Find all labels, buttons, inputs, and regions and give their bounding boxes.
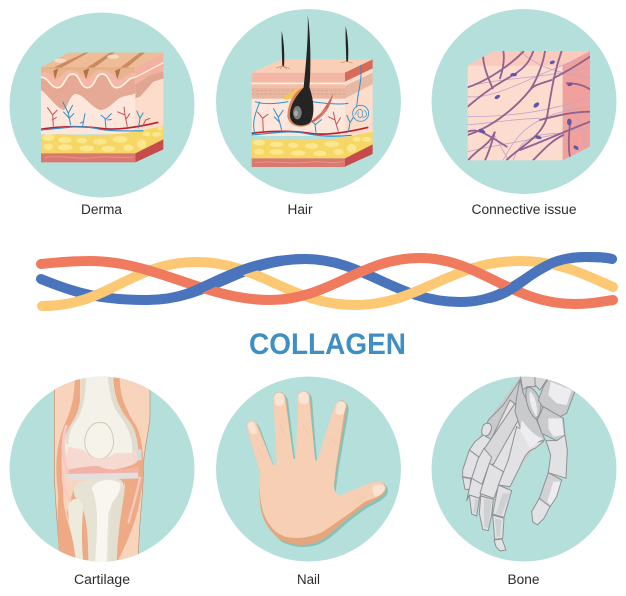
background circle: cartilage	[10, 376, 194, 562]
strand overlaps: blue on top	[175, 257, 612, 298]
background circle: nail	[216, 376, 401, 562]
hand illustration	[247, 391, 388, 547]
panel: derma	[10, 12, 194, 198]
skin cube: derma	[41, 53, 163, 162]
background circle: bone	[432, 376, 616, 562]
chart: collagen triple helix	[41, 257, 613, 306]
label: Hair: Hair	[288, 202, 313, 217]
tissue cube	[468, 51, 590, 160]
hand skeleton illustration	[463, 373, 577, 551]
strand: blue	[41, 257, 612, 302]
background circle: hair	[216, 9, 401, 194]
knee joint illustration	[54, 370, 150, 563]
panel: bone	[432, 373, 616, 562]
title: COLLAGEN	[249, 328, 406, 361]
strand: yellow	[42, 261, 613, 306]
skin cube: hair	[252, 15, 373, 167]
panel: cartilage	[10, 370, 194, 563]
label: Nail: Nail	[297, 572, 320, 587]
label: Cartilage: Cartilage	[74, 572, 130, 587]
background circle: derma	[10, 12, 194, 198]
label: Derma: Derma	[81, 202, 122, 217]
label: Connective issue: Connective issue	[472, 202, 576, 217]
panel: hair	[216, 9, 401, 194]
panel: nail	[216, 376, 401, 562]
strand: red	[41, 258, 613, 304]
panel: connective tissue	[432, 9, 616, 194]
background circle: connective	[432, 9, 616, 194]
label: Bone: Bone	[508, 572, 540, 587]
